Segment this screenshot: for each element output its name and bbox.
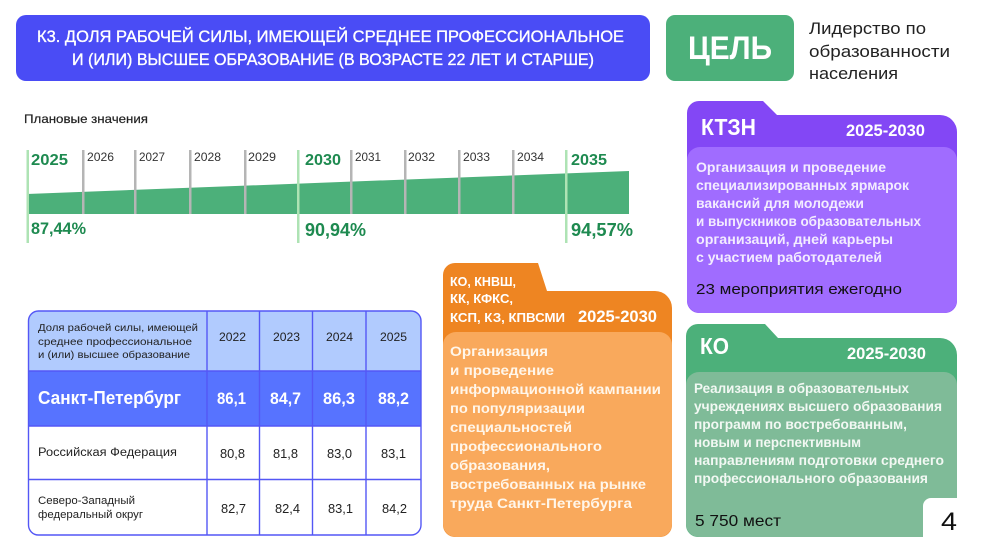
header text	[38, 322, 407, 361]
header text: 2023	[273, 330, 300, 344]
description: востребованных на рынке	[450, 476, 646, 492]
goal text: населения	[809, 64, 898, 83]
target values: 87,44%	[31, 219, 86, 238]
year labels: 2031	[355, 150, 381, 164]
Russian Federation values: Российская Федерация	[38, 447, 177, 459]
Northwest district values	[38, 495, 407, 521]
folder front	[687, 147, 957, 313]
year labels: 2026	[87, 150, 114, 164]
Saint Petersburg values: 84,7	[270, 389, 301, 408]
folder front	[686, 372, 957, 537]
description: с участием работодателей	[696, 250, 882, 265]
panel: orange awareness campaign	[443, 263, 672, 537]
committee: КТЗН	[701, 114, 756, 140]
description	[450, 343, 661, 511]
description	[696, 160, 921, 265]
year labels: 2029	[248, 150, 276, 164]
Northwest district values: 83,1	[328, 501, 353, 516]
heading: planned values: Плановые значения	[24, 112, 148, 126]
folder front	[443, 332, 672, 537]
milestone ticks	[26, 150, 568, 243]
panel: KO education programs	[686, 324, 957, 537]
annual events metric: 23 мероприятия ежегодно	[696, 281, 902, 298]
folder back	[687, 101, 957, 313]
Saint Petersburg values: 86,3	[323, 389, 355, 408]
page number: 4	[941, 508, 957, 536]
description: профессионального образования	[694, 471, 928, 486]
Northwest district values: 84,2	[382, 501, 407, 516]
target values	[31, 219, 633, 240]
title banner: И (ИЛИ) ВЫСШЕЕ ОБРАЗОВАНИЕ (В ВОЗРАСТЕ 22 ЛЕТ И СТАРШЕ)	[72, 50, 594, 69]
responsible committees	[450, 274, 565, 325]
Saint Petersburg values: 88,2	[378, 389, 409, 408]
year labels	[31, 150, 607, 169]
description	[694, 381, 944, 486]
description: Реализация в образовательных	[694, 381, 909, 396]
period: 2025-2030	[578, 307, 657, 326]
Russian Federation values	[38, 446, 406, 461]
period: 2025-2030	[846, 121, 925, 140]
Northwest district values: 82,7	[221, 501, 246, 516]
description: образования,	[450, 457, 550, 473]
Russian Federation values: 83,1	[381, 446, 406, 461]
responsible committees: КСП, КЗ, КПВСМИ	[450, 310, 565, 325]
description: вакансий для молодежи	[696, 196, 864, 211]
timeline chart	[26, 150, 633, 243]
year ticks	[82, 150, 514, 214]
responsible committees: КО, КНВШ,	[450, 274, 516, 289]
header text: 2024	[326, 330, 353, 344]
year labels: 2025	[31, 152, 68, 169]
Saint Petersburg values: Санкт-Петербург	[38, 388, 181, 408]
description: организаций, дней карьеры	[696, 232, 893, 247]
period: 2025-2030	[847, 344, 926, 363]
description: труда Санкт-Петербурга	[450, 495, 632, 511]
year labels: 2033	[463, 150, 490, 164]
year labels: 2028	[194, 150, 221, 164]
description: специальностей	[450, 419, 572, 435]
target values: 94,57%	[571, 220, 633, 240]
goal badge: ЦЕЛЬ	[688, 30, 772, 66]
growth area	[27, 171, 629, 214]
header text: среднее профессиональное	[38, 336, 193, 348]
Saint Petersburg row	[28, 371, 421, 426]
title banner	[16, 15, 650, 81]
header text: 2025	[380, 330, 407, 344]
description: направлениям подготовки среднего	[694, 453, 944, 468]
folder back	[686, 324, 957, 537]
title banner: К3. ДОЛЯ РАБОЧЕЙ СИЛЫ, ИМЕЮЩЕЙ СРЕДНЕЕ ПРОФЕССИОНАЛЬНОЕ	[37, 27, 624, 46]
description: профессионального	[450, 438, 602, 454]
goal text: образованности	[809, 42, 950, 61]
data table	[28, 311, 421, 535]
page number	[923, 498, 990, 557]
description: и проведение	[450, 362, 554, 378]
header text: и (или) высшее образование	[38, 349, 190, 361]
year labels: 2032	[408, 150, 435, 164]
table grid	[28, 311, 421, 535]
committee: КО	[700, 333, 729, 359]
description: программ по востребованным,	[694, 417, 907, 432]
target values: 90,94%	[305, 220, 366, 240]
panel: KTZN job fairs	[687, 101, 957, 313]
description: специализированных ярмарок	[696, 178, 909, 193]
description: Организация и проведение	[696, 160, 887, 175]
Northwest district values: федеральный округ	[38, 509, 143, 521]
goal text	[809, 19, 950, 83]
description: и выпускников образовательных	[696, 214, 921, 229]
Saint Petersburg values	[38, 388, 409, 408]
goal text: Лидерство по	[809, 19, 926, 38]
goal badge	[666, 15, 794, 81]
Russian Federation values: 80,8	[220, 446, 245, 461]
responsible committees: КК, КФКС,	[450, 291, 513, 306]
header text: 2022	[219, 330, 246, 344]
Northwest district values: 82,4	[275, 501, 300, 516]
year labels: 2030	[305, 152, 341, 169]
Russian Federation values: 83,0	[327, 446, 352, 461]
header text: Доля рабочей силы, имеющей	[38, 322, 198, 334]
places metric: 5 750 мест	[695, 513, 782, 530]
description: по популяризации	[450, 400, 585, 416]
description: Организация	[450, 343, 548, 359]
year labels: 2027	[139, 150, 165, 164]
table header row	[28, 311, 421, 371]
description: новым и перспективным	[694, 435, 861, 450]
description: информационной кампании	[450, 381, 661, 397]
year labels: 2034	[517, 150, 544, 164]
Northwest district values: Северо-Западный	[38, 495, 135, 507]
year labels: 2035	[571, 152, 607, 169]
Russian Federation values: 81,8	[273, 446, 298, 461]
folder back	[443, 263, 672, 537]
description: учреждениях высшего образования	[694, 399, 942, 414]
Saint Petersburg values: 86,1	[217, 389, 246, 408]
